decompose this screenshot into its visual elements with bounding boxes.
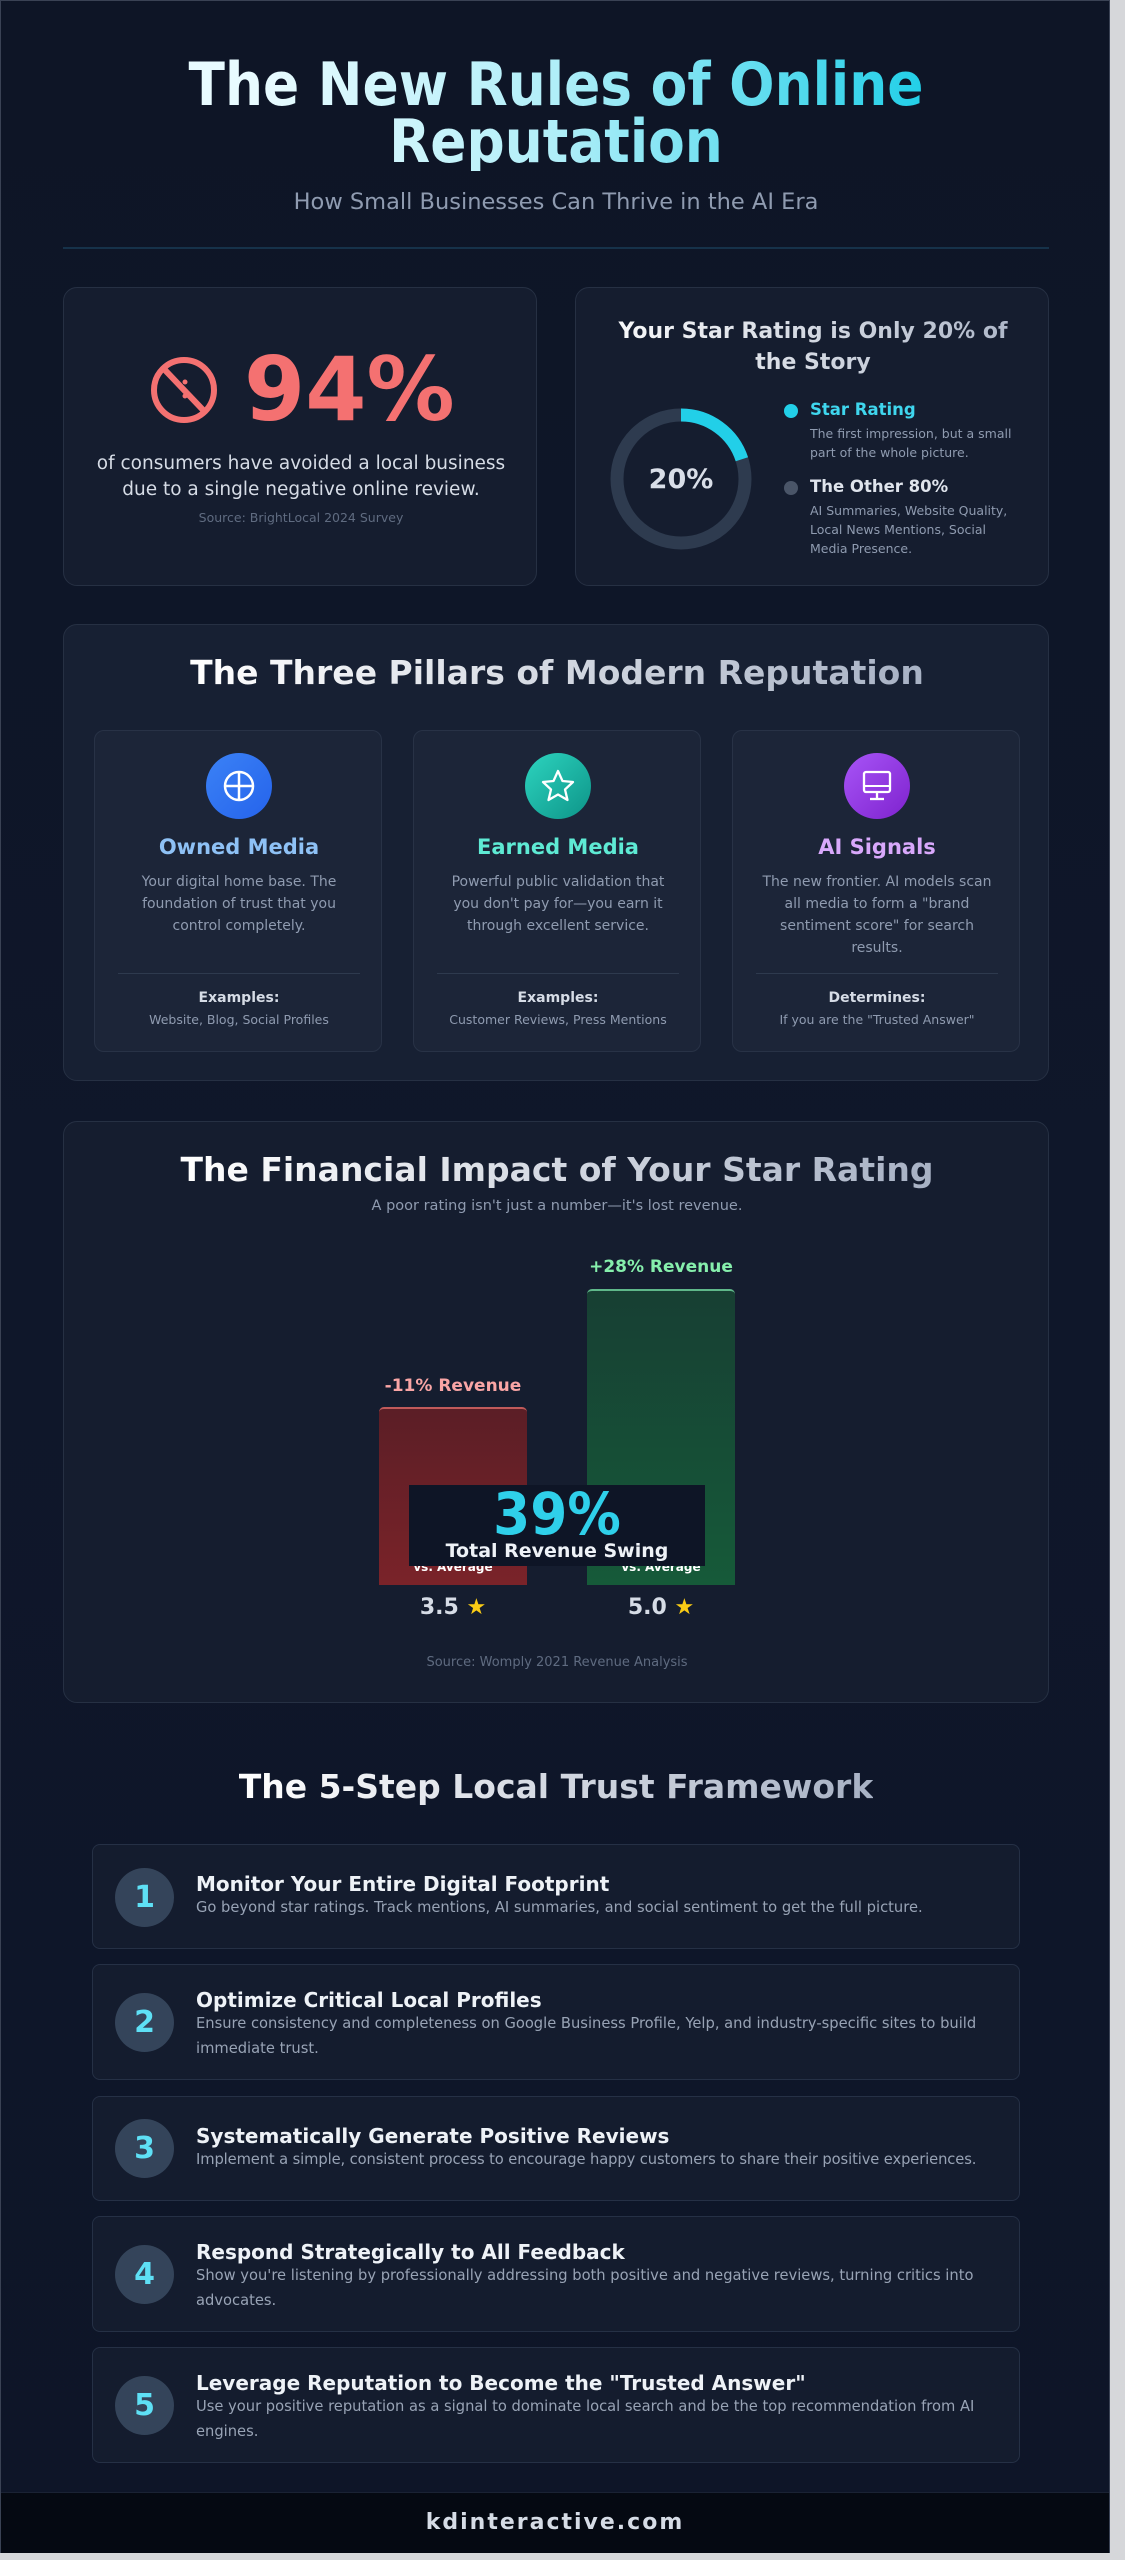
step 2: Optimize Critical Local Profiles	[196, 1988, 542, 2012]
pillar: AI signals: The new frontier. AI models scan all media to form a "brand sentiment score" for search results.	[762, 874, 992, 956]
title	[188, 50, 923, 177]
pillar: owned media: Owned Media	[159, 835, 319, 859]
step 4	[92, 2216, 1020, 2332]
bar: 5.0 stars: vs. Average	[621, 1560, 701, 1574]
pillar: AI signals	[732, 730, 1020, 1052]
step 5	[92, 2347, 1020, 2463]
legend: star rating	[784, 400, 1011, 460]
bar: 3.5 stars	[379, 1376, 527, 1620]
step 3: 3	[134, 2131, 155, 2166]
heading: Your Star Rating is Only 20% of	[618, 319, 1008, 344]
pillar: earned media: Earned Media	[477, 835, 639, 859]
heading: The Financial Impact of Your Star Rating	[180, 1150, 934, 1189]
bar: 3.5 stars: vs. Average	[413, 1560, 493, 1574]
source: Source: BrightLocal 2024 Survey	[199, 510, 403, 525]
step 2	[92, 1964, 1020, 2080]
step 1: Go beyond star ratings. Track mentions, AI summaries, and social sentiment to get the full picture.	[196, 1899, 923, 1916]
pillar: owned media: Examples:	[199, 990, 279, 1006]
big number: 94%	[244, 338, 455, 441]
panel: star rating 20%: Star Rating	[810, 400, 916, 419]
pillar: earned media: Examples:	[518, 990, 598, 1006]
donut chart	[610, 408, 752, 550]
step 3: Systematically Generate Positive Reviews	[196, 2124, 669, 2148]
panel: star rating 20%	[575, 287, 1049, 586]
heading	[576, 316, 1050, 378]
step 4: 4	[134, 2257, 155, 2292]
pillar: owned media: Your digital home base. The foundation of trust that you control completely.	[142, 874, 336, 934]
step 5: 5	[134, 2388, 155, 2423]
legend: other 80%	[784, 477, 1007, 556]
subtitle: How Small Businesses Can Thrive in the AI Era	[294, 189, 818, 215]
step 2: 2	[134, 2005, 155, 2040]
pillar: owned media: Website, Blog, Social Profiles	[149, 1012, 329, 1027]
title: Reputation	[389, 107, 723, 177]
step 3: Implement a simple, consistent process to encourage happy customers to share their positive experiences.	[196, 2151, 976, 2168]
step 1: 1	[134, 1880, 155, 1915]
step 1: Monitor Your Entire Digital Footprint	[196, 1872, 609, 1896]
panel: financial impact	[63, 1121, 1049, 1703]
bar: 5.0 stars: +28% Revenue	[589, 1257, 733, 1277]
footer	[1, 2492, 1109, 2553]
icon: star	[525, 753, 591, 819]
pillar: AI signals: AI Signals	[818, 835, 936, 859]
pillar: earned media	[413, 730, 701, 1052]
bar chart	[379, 1257, 735, 1620]
step 1	[92, 1844, 1020, 1949]
step 5: Use your positive reputation as a signal to dominate local search and be the top recommendation from AI engines.	[196, 2398, 974, 2440]
source: Source: Womply 2021 Revenue Analysis	[426, 1655, 688, 1670]
step 4: Show you're listening by professionally addressing both positive and negative reviews, turning critics into advocates.	[196, 2267, 973, 2309]
bar: 3.5 stars: -11% Revenue	[385, 1376, 521, 1396]
description: due to a single negative online review.	[122, 479, 480, 500]
icon: prohibited	[151, 357, 217, 423]
step 4: Respond Strategically to All Feedback	[196, 2240, 625, 2264]
subheading: A poor rating isn't just a number—it's lost revenue.	[372, 1198, 742, 1214]
panel: star rating 20%: AI Summaries, Website Quality, Local News Mentions, Social Media Presence.	[810, 503, 1007, 556]
panel: 94% stat	[63, 287, 537, 586]
description	[97, 453, 505, 500]
description: of consumers have avoided a local business	[97, 453, 505, 474]
callout: 39% swing: Total Revenue Swing	[446, 1540, 668, 1562]
pillar: earned media: Customer Reviews, Press Mentions	[449, 1012, 667, 1027]
donut chart: 20%	[649, 464, 713, 495]
title: The New Rules of Online	[189, 50, 923, 120]
step 5: Leverage Reputation to Become the "Trusted Answer"	[196, 2371, 806, 2395]
bar: 5.0 stars	[587, 1257, 735, 1620]
step 3	[92, 2096, 1020, 2201]
icon: globe	[206, 753, 272, 819]
panel: star rating 20%: The first impression, but a small part of the whole picture.	[810, 426, 1011, 460]
step 2: Ensure consistency and completeness on Google Business Profile, Yelp, and industry-specific sites to build immediate trust.	[196, 2015, 976, 2057]
heading: framework: The 5-Step Local Trust Framework	[239, 1767, 873, 1806]
callout: 39% swing	[409, 1485, 705, 1566]
panel: three pillars	[63, 624, 1049, 1081]
icon: monitor	[844, 753, 910, 819]
bar: 3.5 stars: 3.5 ★	[420, 1595, 486, 1620]
panel: star rating 20%: The Other 80%	[810, 477, 948, 496]
pillar: owned media	[94, 730, 382, 1052]
pillar: AI signals: If you are the "Trusted Answer"	[779, 1012, 975, 1027]
callout: 39% swing: 39%	[493, 1480, 621, 1548]
bar: 5.0 stars: 5.0 ★	[628, 1595, 694, 1620]
pillar: AI signals: Determines:	[828, 990, 926, 1006]
footer: kdinteractive.com	[426, 2510, 684, 2535]
heading: The Three Pillars of Modern Reputation	[190, 653, 924, 692]
heading: the Story	[755, 350, 871, 375]
pillar: earned media: Powerful public validation that you don't pay for—you earn it through excellent service.	[452, 874, 664, 934]
